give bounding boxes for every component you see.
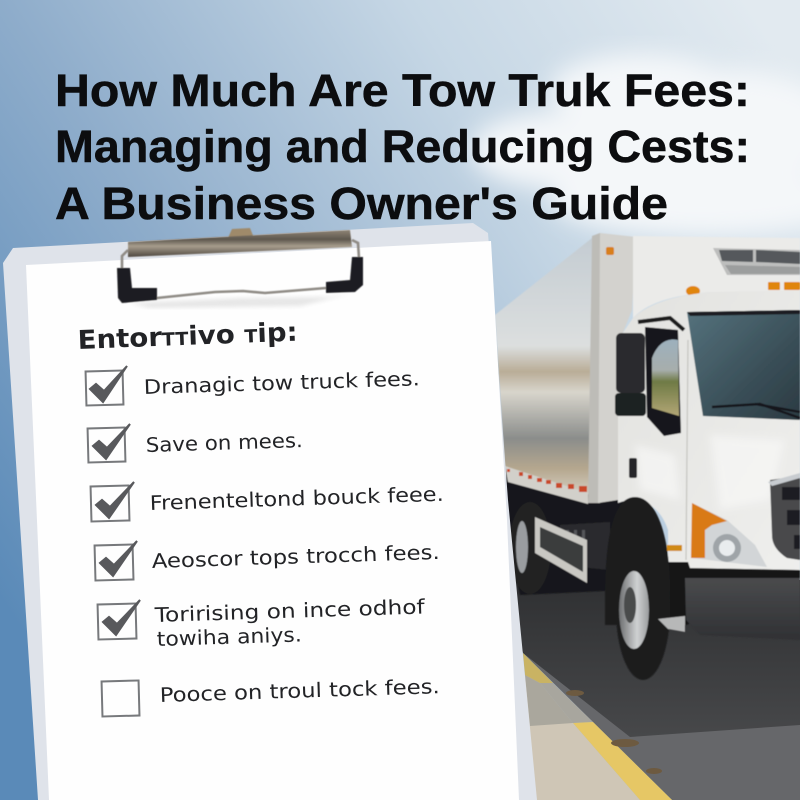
clipboard: [3, 223, 537, 800]
roof fairing: [633, 236, 800, 318]
checklist item 1: Dranagic tow truck fees.: [143, 366, 420, 399]
cargo box side panel: [495, 238, 592, 495]
sidewalk: [525, 675, 640, 800]
side rail with reflectors: [505, 466, 588, 504]
door reflections: [635, 435, 785, 510]
clip nub: [227, 228, 254, 240]
windshield: [687, 310, 800, 420]
cab step: [658, 616, 685, 632]
side window: [638, 318, 684, 436]
clouds: [470, 54, 800, 236]
amber roof lights: [686, 282, 800, 296]
checklist item 1: [86, 366, 420, 405]
cab body: [618, 290, 800, 580]
checklist item 4: [95, 540, 440, 580]
fuel tank and step frame: [535, 517, 610, 583]
headlight: [691, 503, 767, 567]
road and sidewalk: [505, 580, 800, 800]
checklist item 6: Pooce on troul tock fees.: [159, 674, 440, 707]
left grip: [117, 268, 157, 303]
side mirror: [615, 333, 646, 416]
title: A Business Owner's Guide: [55, 178, 668, 229]
title: [55, 65, 750, 229]
title: How Much Are Tow Truk Fees:: [55, 65, 750, 116]
metal clip: [117, 228, 363, 308]
clip shadow: [130, 294, 350, 308]
checklist item 2: Save on mees.: [145, 428, 303, 457]
checklist item 3: Frenenteltond bouck feee.: [149, 482, 444, 515]
right grip: [326, 257, 363, 293]
curb: [540, 683, 593, 723]
bumper: [668, 562, 800, 640]
wheel arch and fender: [605, 497, 670, 625]
checklist item 6: [102, 674, 440, 716]
clip wire: [122, 240, 359, 298]
wipers: [712, 404, 800, 418]
truck shadow on asphalt: [505, 580, 800, 737]
truck: [495, 233, 800, 680]
leaves: [566, 690, 662, 774]
checklist item 4: Aeoscor tops trocch fees.: [151, 540, 440, 573]
checklist item 3: [91, 482, 444, 521]
front wheel: [616, 540, 670, 680]
checklist item 5: [98, 594, 426, 651]
checklist item 5: towiha aniys.: [156, 622, 302, 651]
box corner post and front panel: [588, 233, 636, 503]
checklist item 2: [88, 424, 303, 462]
undercarriage: [505, 465, 625, 595]
roof vent: [713, 248, 800, 275]
asphalt: [505, 580, 800, 800]
clipboard backing board: [3, 223, 537, 800]
door seam and handle: [629, 340, 688, 560]
clip bar: [128, 230, 352, 257]
checklist item 5: Torirising on ince odhof: [153, 594, 426, 627]
grille: [768, 473, 800, 560]
paper sheet: [26, 241, 519, 800]
title: Managing and Reducing Cests:: [55, 121, 750, 172]
rear wheel: [509, 502, 551, 594]
checklist heading: Entorttivo tip:: [77, 318, 298, 356]
